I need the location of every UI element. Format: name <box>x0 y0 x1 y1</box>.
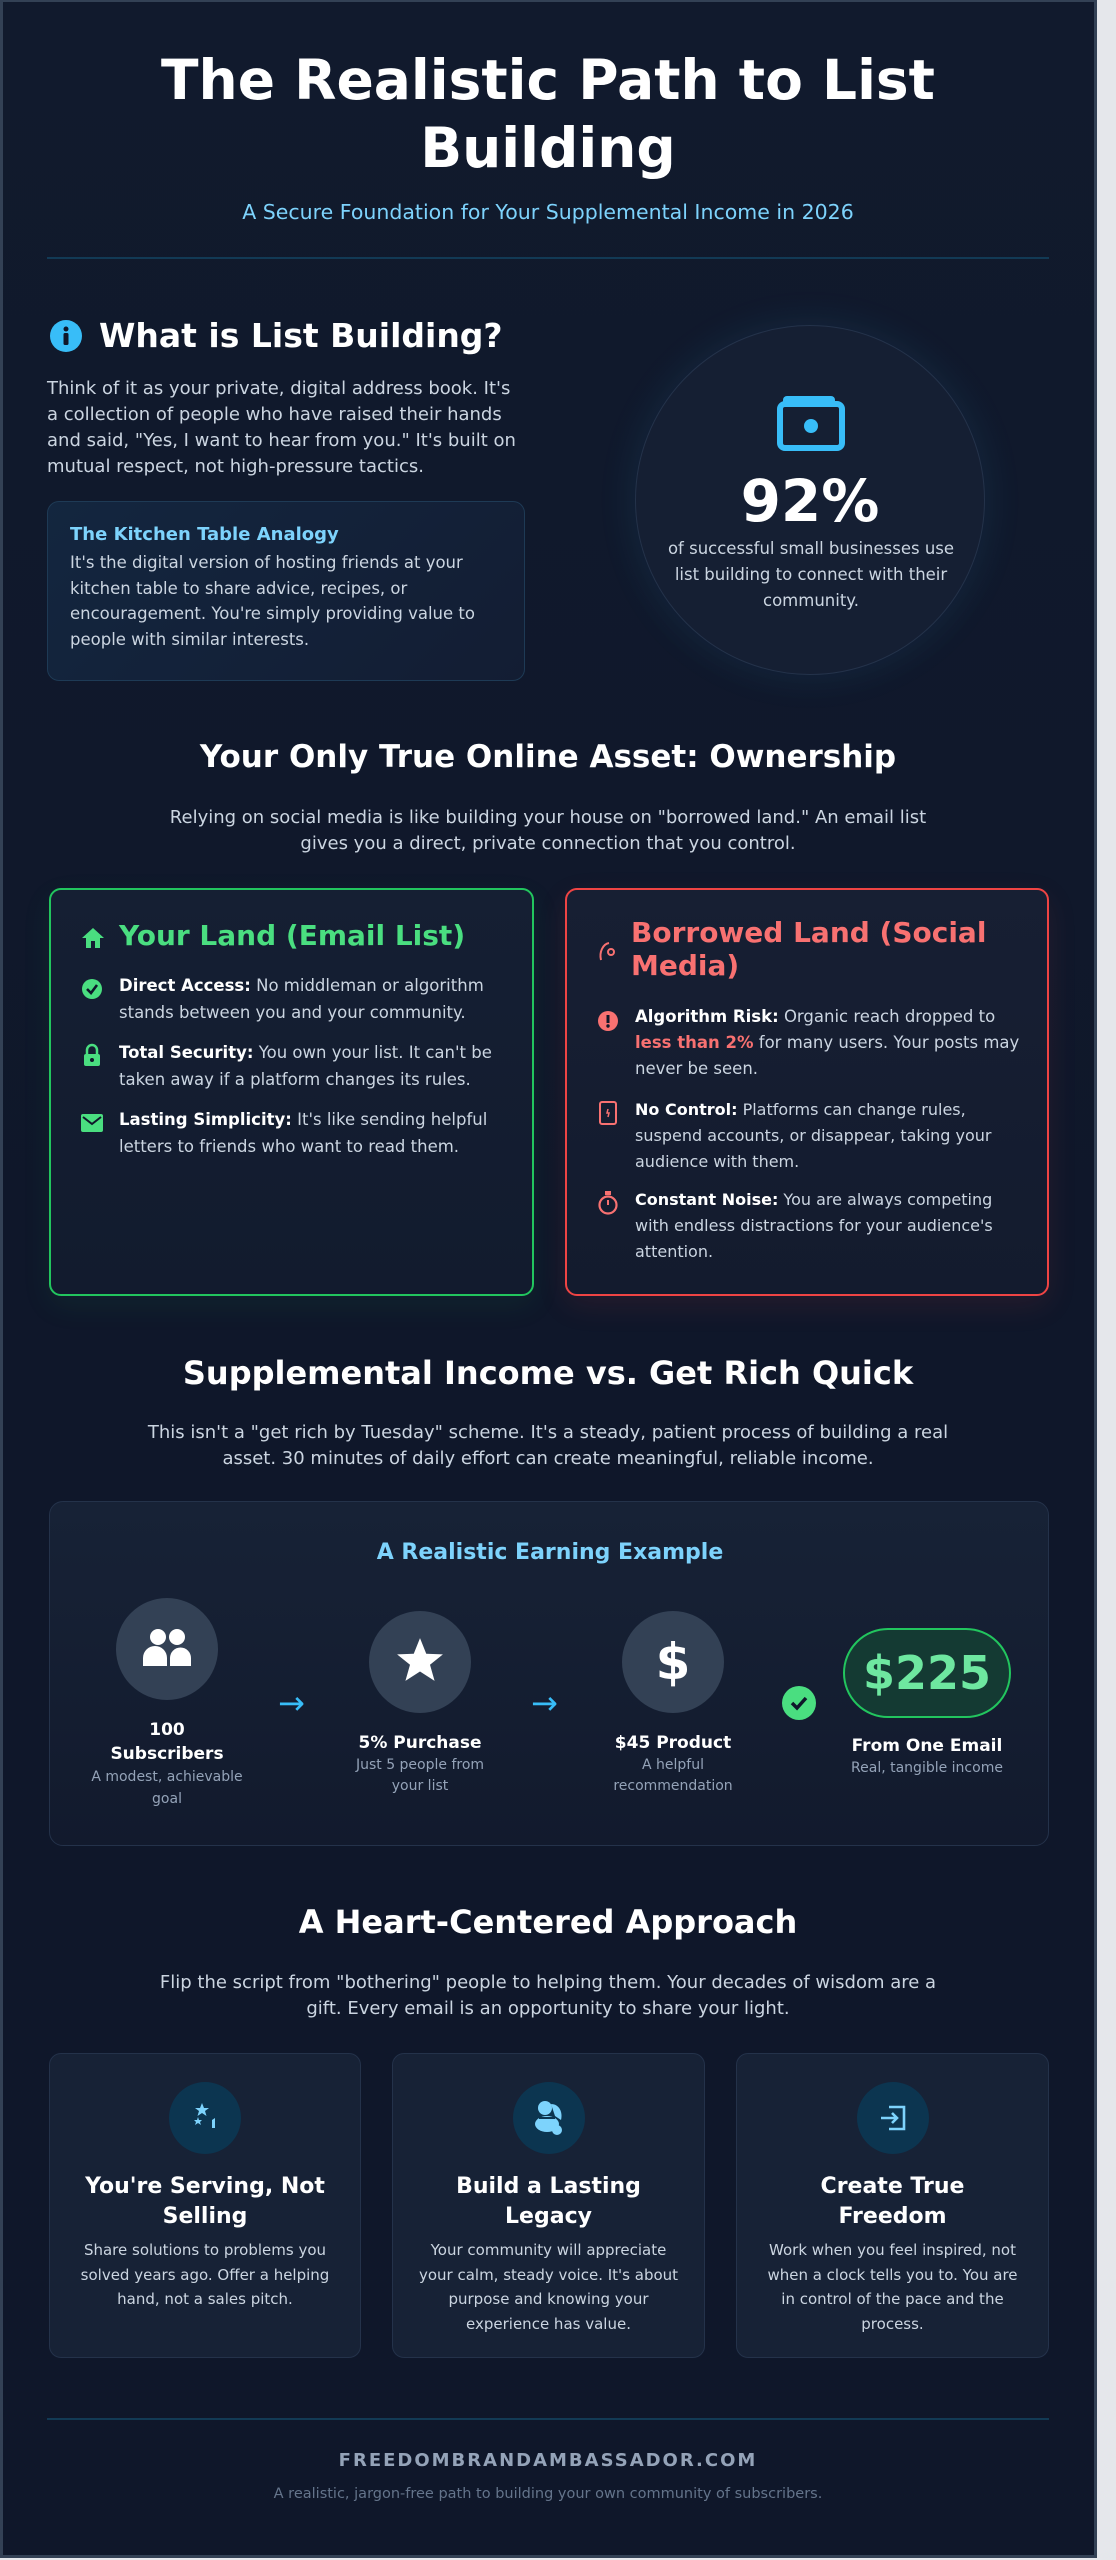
card: legacy <box>392 2053 705 2358</box>
step: product <box>613 1611 733 1794</box>
step: product: A helpful <box>642 1757 704 1773</box>
card: serving: Share solutions to problems you solved years ago. Offer a helping hand, not a sales pitch. <box>81 2241 329 2308</box>
card: legacy: Build a Lasting Legacy <box>456 2174 641 2229</box>
item: algorithm risk <box>598 1007 1019 1078</box>
callout: kitchen table <box>47 501 525 681</box>
icon: wallet <box>777 396 845 451</box>
icon: broken link <box>600 942 615 960</box>
result: $225: $225 <box>863 1646 991 1700</box>
panel: borrowed land: Borrowed Land (Social Media) <box>631 916 986 982</box>
panel: your land <box>49 888 534 1296</box>
callout: kitchen table: It's the digital version of hosting friends at your kitchen table to share advice, recipes, or encouragement. You're simply providing value to people with similar interests. <box>70 553 475 648</box>
item: direct access: Direct Access: No middleman or algorithm stands between you and your community. <box>119 976 484 1022</box>
arrow: → <box>531 1684 558 1722</box>
ownership text: Relying on social media is like building your house on "borrowed land." An email list gives you a direct, private connection that you control. <box>170 807 926 854</box>
card: freedom: Work when you feel inspired, not when a clock tells you to. You are in control of the pace and the process. <box>767 2241 1018 2332</box>
item: total security: Total Security: You own your list. It can't be taken away if a platform changes its rules. <box>119 1043 492 1089</box>
footer brand: FREEDOMBRANDAMBASSADOR.COM <box>339 2450 757 2471</box>
stat circle: of successful small businesses use list building to connect with their community. <box>668 539 954 610</box>
title: Building <box>420 116 676 180</box>
stat circle <box>635 325 985 675</box>
step: product: $45 Product <box>615 1733 731 1753</box>
step: purchase <box>355 1611 484 1794</box>
callout: kitchen table: The Kitchen Table Analogy <box>70 524 339 545</box>
heading: what is list building: What is List Building? <box>99 316 503 355</box>
step: product: $ <box>656 1633 690 1691</box>
step: purchase: 5% Purchase <box>358 1733 482 1753</box>
result: $225: From One Email <box>852 1736 1002 1756</box>
stat number: 92% <box>741 467 879 535</box>
footer tagline: A realistic, jargon-free path to building your own community of subscribers. <box>274 2486 822 2502</box>
panel: earning example <box>49 1501 1049 1846</box>
panel: your land: Your Land (Email List) <box>119 919 465 952</box>
heading: heart-centered: A Heart-Centered Approach <box>299 1903 797 1941</box>
title <box>161 48 935 180</box>
heading: supplemental income: Supplemental Income vs. Get Rich Quick <box>183 1354 913 1392</box>
title: The Realistic Path to List <box>161 48 935 112</box>
step: subscribers: Subscribers <box>110 1744 224 1764</box>
card: legacy: Your community will appreciate your calm, steady voice. It's about purpose and knowing your experience has value. <box>419 2241 678 2332</box>
icon: info <box>50 320 82 352</box>
step: subscribers: 100 <box>149 1720 185 1740</box>
icon: check <box>782 1686 816 1720</box>
arrow: → <box>278 1684 305 1722</box>
card: serving <box>49 2053 361 2358</box>
step: subscribers: A modest, achievable goal <box>91 1769 243 1807</box>
heading: ownership: Your Only True Online Asset: Ownership <box>200 739 896 775</box>
step: product: recommendation <box>613 1778 733 1794</box>
result: $225: Real, tangible income <box>851 1760 1003 1776</box>
item: lasting simplicity: Lasting Simplicity: It's like sending helpful letters to friends who want to read them. <box>119 1110 487 1156</box>
icon: house <box>82 928 104 948</box>
intro paragraph: Think of it as your private, digital address book. It's a collection of people who have raised their hands and said, "Yes, I want to hear from you." It's built on mutual respect, not high-pressure tactics. <box>47 378 516 477</box>
panel: earning example: A Realistic Earning Example <box>377 1540 723 1565</box>
subtitle: A Secure Foundation for Your Supplemental Income in 2026 <box>242 200 854 224</box>
step: subscribers <box>91 1598 243 1807</box>
supplemental text: This isn't a "get rich by Tuesday" scheme. It's a steady, patient process of building a real asset. 30 minutes of daily effort can create meaningful, reliable income. <box>148 1422 948 1469</box>
result: $225 <box>843 1628 1011 1776</box>
step: purchase: Just 5 people from <box>356 1757 484 1773</box>
item: no control: No Control: Platforms can change rules, suspend accounts, or disappear, taking your audience with them. <box>635 1100 992 1171</box>
step: purchase: your list <box>392 1778 448 1794</box>
panel: borrowed land <box>565 888 1049 1296</box>
item: algorithm risk: less than 2% for many users. Your posts may never be seen. <box>635 1033 1019 1078</box>
item: algorithm risk: Algorithm Risk: Organic reach dropped to <box>635 1007 995 1026</box>
card: serving: You're Serving, Not Selling <box>85 2174 325 2229</box>
card: freedom: Create True Freedom <box>821 2174 964 2229</box>
card: freedom <box>736 2053 1049 2358</box>
heart text: Flip the script from "bothering" people to helping them. Your decades of wisdom are a gift. Every email is an opportunity to share your light. <box>160 1972 936 2019</box>
item: constant noise: Constant Noise: You are always competing with endless distractions for your audience's attention. <box>635 1190 993 1261</box>
